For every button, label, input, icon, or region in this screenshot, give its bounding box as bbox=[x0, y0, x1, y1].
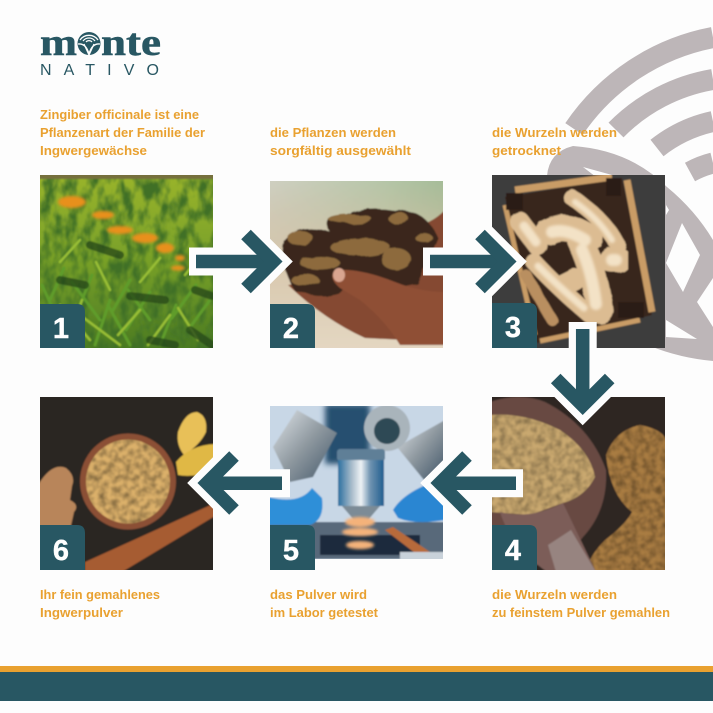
caption step 4: zu feinstem Pulver gemahlen bbox=[492, 605, 670, 620]
panel: step 3 photo, ginger in wooden crate bbox=[490, 173, 667, 350]
caption step 2 bbox=[270, 125, 412, 158]
badge 4: 4 bbox=[505, 535, 521, 567]
caption step 6: Ingwerpulver bbox=[40, 605, 123, 620]
panel: step 6 photo, powder bowl bbox=[38, 395, 215, 572]
background watermark emblem bbox=[547, 38, 713, 361]
light glow bbox=[342, 517, 378, 549]
logo word: monte bbox=[40, 22, 161, 64]
badge 6 bbox=[40, 525, 85, 570]
badge 1 bbox=[40, 304, 85, 348]
footer band bbox=[0, 666, 713, 701]
badge 1: 1 bbox=[53, 313, 69, 345]
left objective bbox=[273, 410, 337, 482]
panel: step 5 photo, microscope bbox=[268, 404, 445, 561]
hands bbox=[288, 210, 445, 342]
caption step 6 bbox=[40, 587, 160, 620]
ginger slices bbox=[178, 412, 206, 455]
caption step 1: Ingwergewächse bbox=[40, 143, 147, 158]
logo word: monte: m bbox=[40, 22, 77, 64]
ginger root bbox=[38, 467, 76, 530]
logo word: NATIVO: NATIVO bbox=[40, 62, 159, 79]
caption step 4: die Wurzeln werden bbox=[492, 587, 617, 602]
caption step 3: die Wurzeln werden bbox=[492, 125, 617, 140]
caption step 6: Ihr fein gemahlenes bbox=[40, 587, 160, 602]
caption step 1: Pflanzenart der Familie der bbox=[40, 125, 205, 140]
caption step 4 bbox=[492, 587, 670, 620]
caption step 3 bbox=[492, 125, 617, 158]
arrow 4 to 5 bbox=[440, 456, 523, 510]
right objective bbox=[397, 420, 445, 480]
badge 5 bbox=[270, 525, 315, 570]
arrow 1 to 2 bbox=[189, 234, 273, 288]
ginger highlights bbox=[524, 202, 616, 308]
panel: step 1 photo, ginger field bbox=[38, 173, 215, 350]
ginger bbox=[585, 425, 667, 572]
caption step 2: die Pflanzen werden bbox=[270, 125, 396, 140]
badge 3: 3 bbox=[505, 312, 521, 344]
logo word: monte: nte bbox=[101, 22, 161, 64]
glove right bbox=[392, 486, 443, 524]
caption step 5: im Labor getestet bbox=[270, 605, 379, 620]
caption step 3: getrocknet bbox=[492, 143, 562, 158]
badge 4 bbox=[492, 525, 537, 570]
badge 6: 6 bbox=[53, 535, 69, 567]
arrow 2 to 3 bbox=[423, 234, 507, 288]
arrow 5 to 6 bbox=[207, 456, 290, 510]
badge 2 bbox=[270, 304, 315, 348]
powder bbox=[490, 415, 595, 515]
stage bbox=[268, 522, 445, 559]
panel: step 4 photo, powder and ginger bbox=[490, 395, 667, 572]
bowl bbox=[490, 397, 606, 565]
spoon bbox=[85, 503, 215, 572]
panel: step 2 photo, hands with ginger bbox=[268, 179, 445, 350]
badge 3 bbox=[492, 303, 537, 348]
caption step 5: das Pulver wird bbox=[270, 587, 367, 602]
ginger root bbox=[282, 208, 438, 296]
caption step 5 bbox=[270, 587, 379, 620]
arrow 3 to 4 bbox=[556, 322, 610, 406]
caption step 1 bbox=[40, 107, 205, 158]
caption step 1: Zingiber officinale ist eine bbox=[40, 107, 199, 122]
thumb bbox=[332, 270, 445, 345]
logo bbox=[40, 22, 161, 79]
logo emblem bbox=[78, 32, 100, 55]
caption step 2: sorgfältig ausgewählt bbox=[270, 143, 412, 158]
badge 2: 2 bbox=[283, 313, 299, 345]
spoon bbox=[500, 503, 596, 572]
ginger roots bbox=[520, 198, 618, 320]
glove left bbox=[268, 488, 322, 525]
bowl bbox=[80, 434, 176, 530]
badge 5: 5 bbox=[283, 535, 299, 567]
central lens bbox=[337, 449, 385, 461]
turret eye bbox=[364, 405, 410, 451]
